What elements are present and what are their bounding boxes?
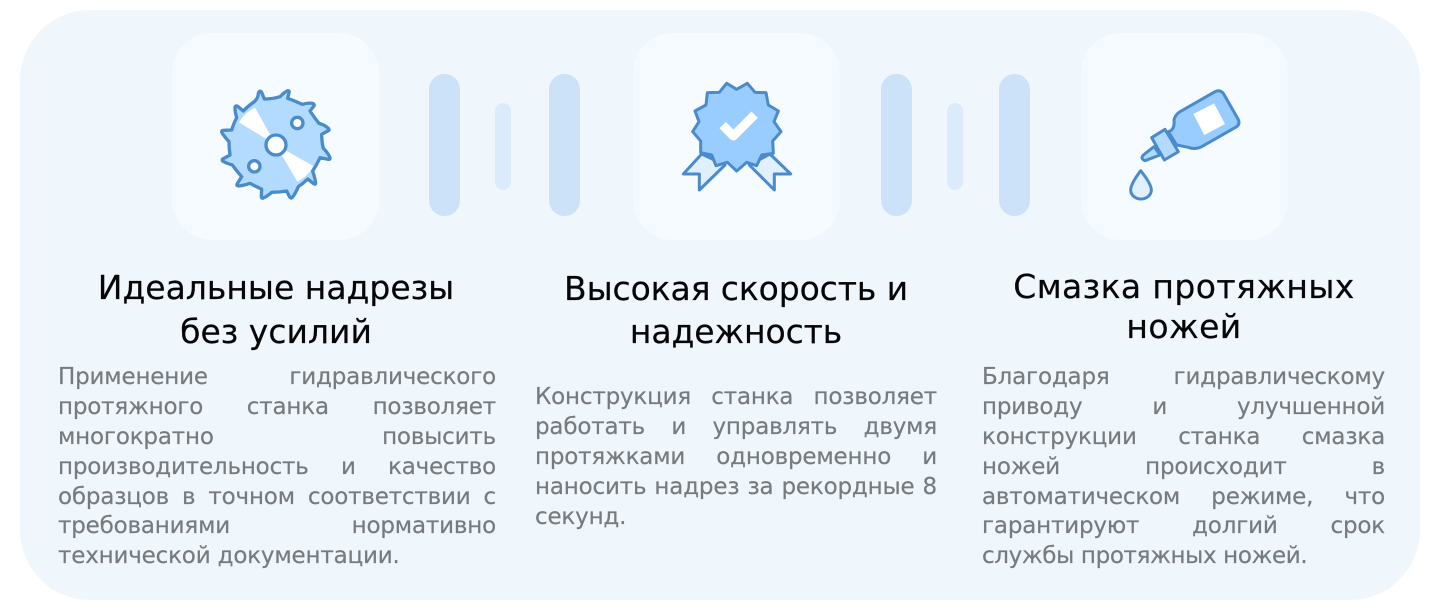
body text: column 2: секунд. (535, 504, 626, 530)
icon: oil bottle with drop (1129, 89, 1240, 200)
body text: column 3: службы протяжных ножей. (982, 543, 1307, 569)
body text: column 2: протяжками одновременно и (535, 444, 937, 470)
body text: column 2: Конструкция станка позволяет (535, 384, 937, 410)
icon: quality rosette (682, 82, 792, 192)
icon: saw blade (220, 89, 332, 200)
heading: column 2: надежность (630, 312, 842, 351)
heading: column 1 (98, 268, 454, 351)
body text: column 3: Благодаря гидравлическому (982, 364, 1385, 390)
body text: column 1: протяжного станка позволяет (58, 394, 496, 420)
heading: column 1: без усилий (180, 312, 372, 351)
heading: column 2: Высокая скорость и (564, 269, 908, 308)
decorative bars (429, 74, 1030, 216)
heading: column 3: Смазка протяжных (1013, 267, 1355, 306)
heading: column 1: Идеальные надрезы (98, 268, 454, 307)
body text: column 1: технической документации. (58, 543, 400, 569)
heading: column 2 (564, 269, 908, 351)
card: saw blade icon (172, 33, 379, 240)
body text: column 1 (58, 364, 496, 569)
body text: column 2: наносить надрез за рекордные 8 (535, 474, 937, 500)
body text: column 3: приводу и улучшенной (982, 394, 1385, 420)
body text: column 3: ножей происходит в (982, 454, 1385, 480)
body text: column 2: работать и управлять двумя (535, 414, 937, 440)
body text: column 3: гарантируют долгий срок (982, 513, 1385, 539)
body text: column 3 (982, 364, 1385, 569)
body text: column 3: автоматическом режиме, что (982, 484, 1385, 510)
card: oil bottle icon (1081, 33, 1288, 240)
body text: column 1: многократно повысить (58, 424, 496, 450)
body text: column 1: производительность и качество (58, 454, 496, 480)
body text: column 1: образцов в точном соответствии с (58, 484, 496, 510)
body text: column 2 (535, 384, 937, 530)
heading: column 3: ножей (1126, 307, 1242, 346)
heading: column 3 (1013, 267, 1355, 346)
body text: column 1: Применение гидравлического (58, 364, 496, 390)
card: badge icon (633, 33, 840, 240)
body text: column 3: конструкции станка смазка (982, 424, 1385, 450)
body text: column 1: требованиями нормативно (58, 513, 496, 539)
